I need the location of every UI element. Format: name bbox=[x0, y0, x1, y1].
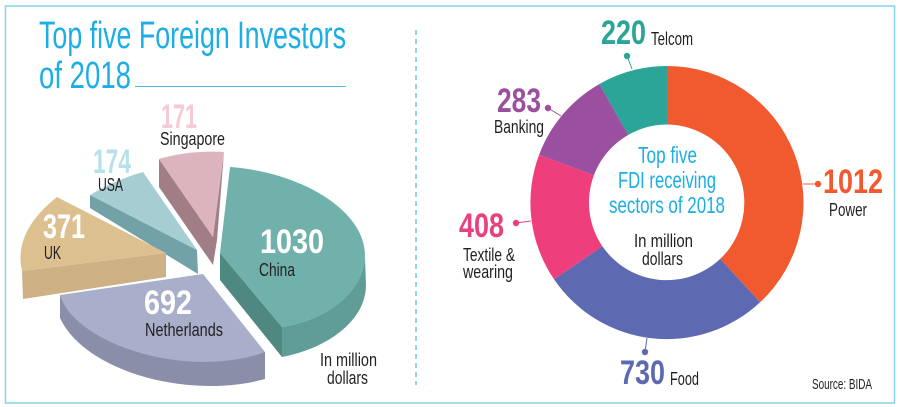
label: Power 1012: Power bbox=[829, 200, 867, 220]
label: Textile and wearing 408: wearing bbox=[462, 262, 513, 282]
label: UK 371 bbox=[43, 208, 85, 263]
title: Top five Foreign Investors bbox=[39, 15, 346, 57]
donut centre heading: sectors of 2018 bbox=[609, 192, 725, 218]
label: USA 174: USA bbox=[98, 175, 123, 195]
segment: Telcom bbox=[599, 66, 667, 135]
unit note centre: dollars bbox=[642, 249, 683, 269]
label: Food 730 bbox=[620, 338, 699, 392]
label: Telcom 220 bbox=[601, 14, 693, 69]
label: Singapore 171 bbox=[160, 98, 225, 149]
label: China 1030: 1030 bbox=[260, 223, 324, 261]
donut chart: FDI receiving sectors bbox=[530, 66, 803, 339]
label: Textile and wearing 408: Textile & bbox=[463, 245, 515, 265]
title bbox=[39, 15, 346, 97]
slice: Netherlands bbox=[60, 274, 265, 386]
label: USA 174 bbox=[93, 143, 131, 195]
slice: USA bbox=[90, 172, 198, 274]
segment: Food bbox=[554, 246, 760, 339]
unit note centre bbox=[634, 231, 693, 269]
label: UK 371: 371 bbox=[43, 208, 85, 246]
donut centre heading bbox=[609, 142, 725, 218]
unit note centre: In million bbox=[634, 231, 693, 251]
unit note left: In million bbox=[320, 350, 377, 370]
label: Telcom 220: 220 bbox=[601, 14, 646, 52]
label: Banking 283: Banking bbox=[494, 117, 544, 137]
label: Power 1012 bbox=[803, 163, 883, 220]
label: Netherlands 692 bbox=[144, 284, 223, 340]
label: Singapore 171: Singapore bbox=[160, 129, 225, 149]
label: Banking 283: 283 bbox=[497, 82, 541, 120]
label: Food 730: 730 bbox=[620, 354, 665, 392]
label: Power 1012: 1012 bbox=[823, 163, 883, 201]
label: Banking 283 bbox=[494, 82, 561, 137]
label: Food 730: Food bbox=[670, 369, 699, 389]
donut centre heading: FDI receiving bbox=[618, 167, 716, 193]
unit note left bbox=[320, 350, 377, 388]
label: Netherlands 692: Netherlands bbox=[145, 320, 223, 340]
donut centre heading: Top five bbox=[638, 142, 697, 168]
segment: Textile and wearing bbox=[530, 155, 602, 279]
label: China 1030 bbox=[259, 223, 324, 280]
slice: UK bbox=[20, 197, 166, 299]
slice: China bbox=[220, 167, 366, 357]
segment: Banking bbox=[539, 84, 628, 175]
label: Singapore 171: 171 bbox=[161, 98, 197, 136]
label: UK 371: UK bbox=[44, 243, 61, 263]
unit note left: dollars bbox=[327, 368, 368, 388]
label: Textile and wearing 408: 408 bbox=[459, 207, 504, 245]
slice: Singapore bbox=[159, 152, 224, 265]
label: Netherlands 692: 692 bbox=[144, 284, 192, 322]
label: Telcom 220: Telcom bbox=[651, 29, 693, 49]
label: China 1030: China bbox=[259, 260, 296, 280]
title: of 2018 bbox=[39, 55, 131, 97]
label: Textile and wearing 408 bbox=[459, 207, 531, 282]
exploded 3D pie chart: foreign investors bbox=[20, 98, 377, 388]
segment: Power bbox=[667, 66, 803, 302]
label: USA 174: 174 bbox=[93, 143, 131, 181]
